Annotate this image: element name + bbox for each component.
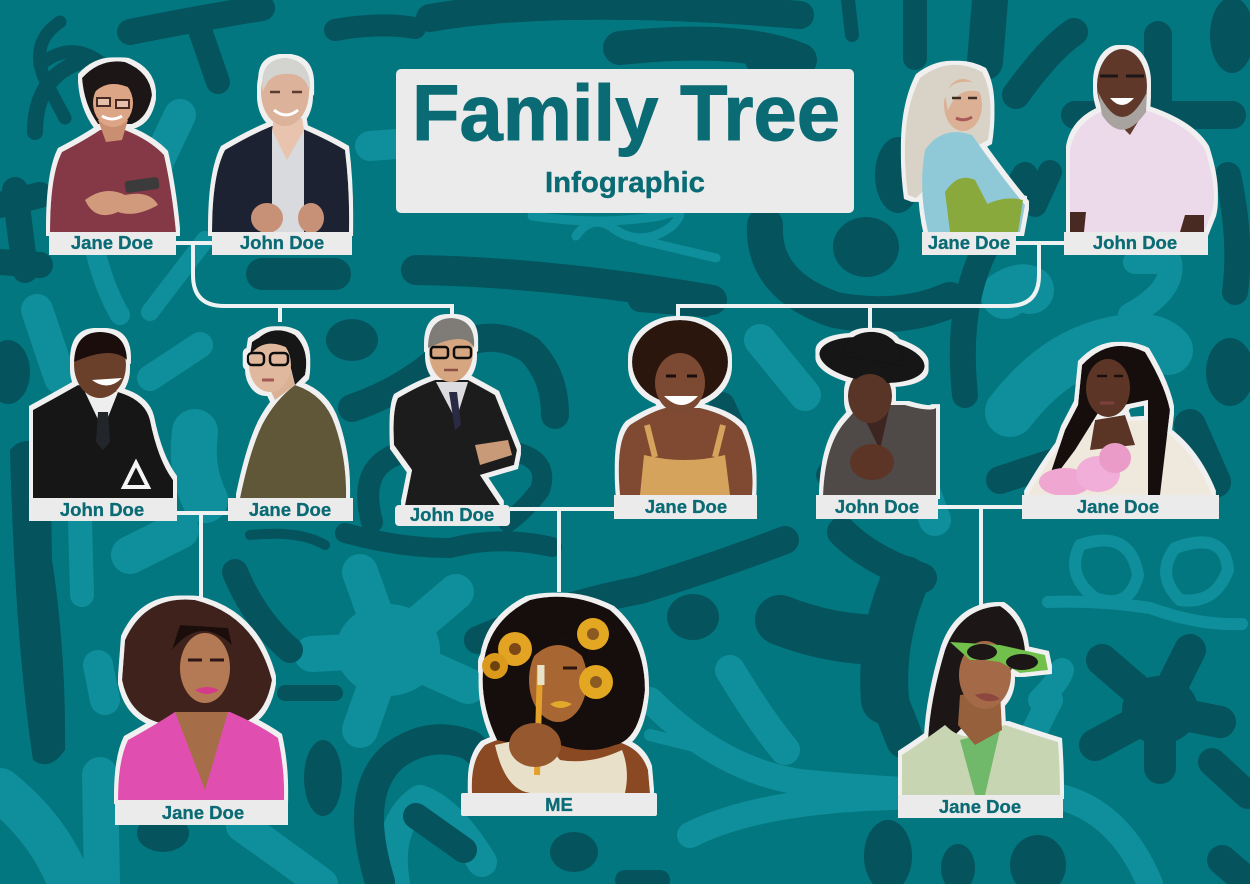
- name label: John Doe: [1093, 232, 1177, 253]
- person: father: [394, 318, 517, 526]
- name label: ME: [545, 794, 573, 815]
- person: second uncle: [816, 331, 938, 519]
- photo: woman with afro in tan top: [619, 320, 753, 495]
- name label: [461, 793, 657, 816]
- photo: curly-haired woman in pink: [118, 600, 284, 800]
- photo: man with glasses, arms crossed: [394, 318, 517, 505]
- name label: [228, 498, 353, 521]
- photo: woman with afro, sunflowers and paintbrush: [472, 597, 650, 793]
- person: cousin in pink blazer: [115, 600, 288, 825]
- photo: man in navy blazer: [212, 58, 349, 233]
- name label: Jane Doe: [939, 796, 1021, 817]
- name label: Jane Doe: [249, 499, 331, 520]
- title panel: [396, 68, 854, 213]
- person: cousin with green sunglasses: [898, 606, 1063, 818]
- title text: Family Tree: [412, 68, 840, 157]
- name label: [898, 795, 1063, 818]
- photo: woman in maroon shirt: [50, 61, 176, 232]
- photo: smiling man in black suit: [33, 332, 173, 498]
- person: grandfather, paternal side: [212, 58, 352, 255]
- name label: [614, 495, 757, 519]
- name label: [115, 800, 288, 825]
- name label: [1022, 495, 1219, 519]
- name label: Jane Doe: [162, 802, 244, 823]
- person: uncle: [29, 332, 177, 521]
- name label: [395, 504, 510, 526]
- name label: [49, 232, 176, 255]
- photo: bearded man in pink shirt: [1070, 49, 1214, 232]
- name label: Jane Doe: [1077, 496, 1159, 517]
- name label: [816, 495, 938, 519]
- name label: Jane Doe: [928, 232, 1010, 253]
- name label: [1064, 232, 1208, 255]
- name label: John Doe: [60, 499, 144, 520]
- name label: Jane Doe: [645, 496, 727, 517]
- person: second aunt: [1022, 346, 1219, 519]
- person: me: [461, 597, 657, 816]
- subtitle text: Infographic: [545, 167, 705, 199]
- photo: woman with braids and flowers: [1028, 346, 1212, 496]
- name label: [212, 232, 352, 255]
- photo: man in black hat and grey jacket: [816, 331, 936, 495]
- photo: silver-haired woman in blue vest: [905, 65, 1025, 232]
- person: aunt: [228, 330, 353, 521]
- person: mother: [614, 320, 757, 519]
- photo: woman with glasses in olive coat: [240, 330, 346, 498]
- connector lines between family members: [176, 243, 1064, 606]
- person: grandmother, paternal side: [49, 61, 176, 255]
- name label: Jane Doe: [71, 232, 153, 253]
- photo: woman with braids in pale green blazer: [902, 606, 1060, 795]
- name label: John Doe: [835, 496, 919, 517]
- name label: [29, 498, 177, 521]
- person: grandfather, maternal side: [1064, 49, 1214, 255]
- name label: John Doe: [410, 504, 494, 525]
- person: grandmother, maternal side: [905, 65, 1025, 255]
- name label: John Doe: [240, 232, 324, 253]
